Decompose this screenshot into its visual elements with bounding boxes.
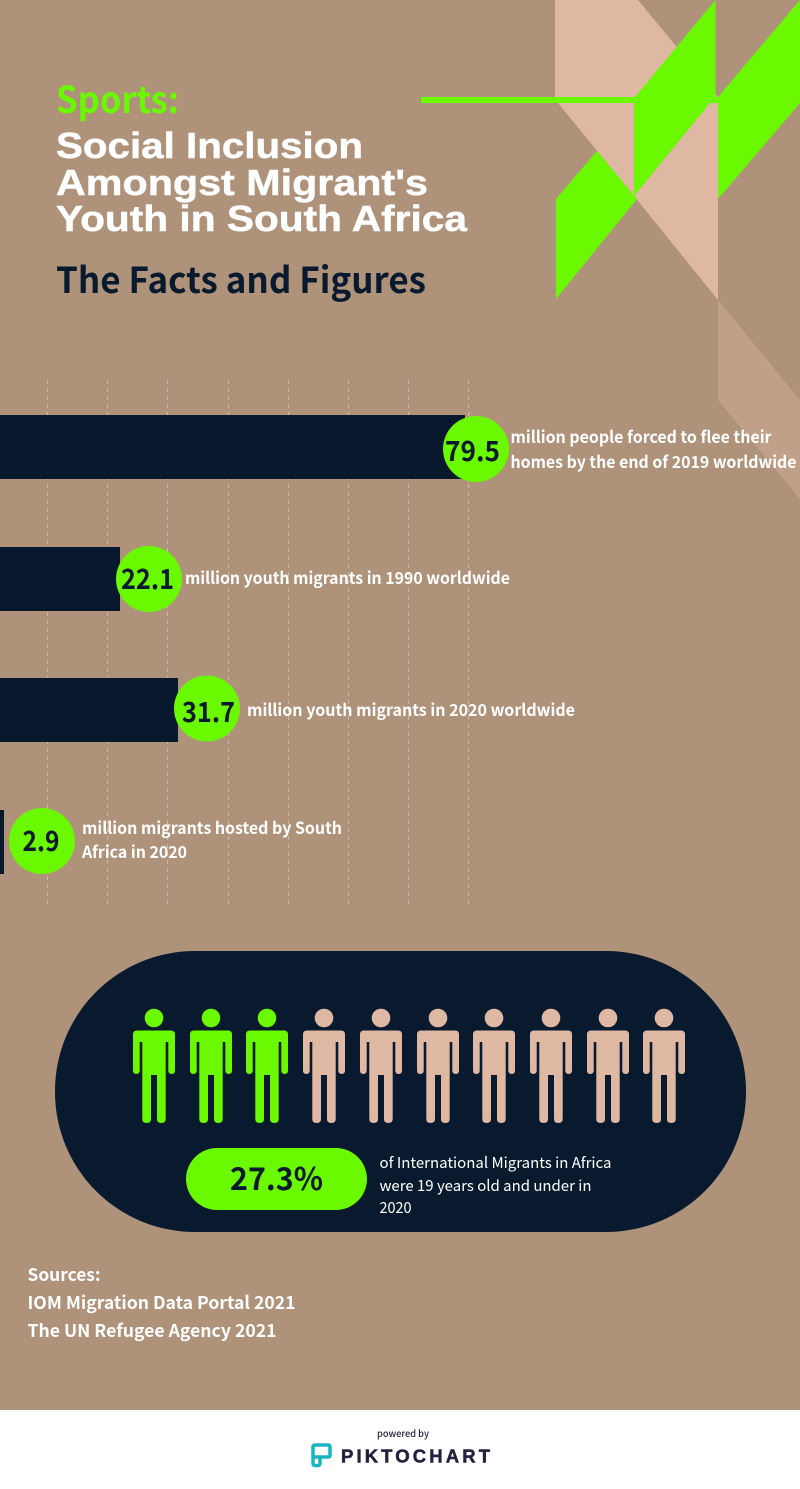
icon: Piktochart logo (313, 1445, 330, 1466)
stat description: were 19 years old and under in (380, 1175, 592, 1196)
bar: 31.7 million youth migrants 2020: 31.7 (182, 691, 235, 731)
bar: 22.1 million youth migrants 1990 (0, 546, 510, 612)
stat description: 2020 (380, 1197, 412, 1218)
title: main heading: Social Inclusion (56, 125, 363, 166)
stat description (380, 1152, 612, 1218)
sources: IOM Migration Data Portal 2021 (28, 1289, 296, 1315)
bar: 79.5 million forced to flee: 79.5 (445, 430, 500, 470)
footer: powered by Piktochart (0, 1410, 800, 1489)
bar: 79.5 million forced to flee (0, 415, 796, 482)
bar: 2.9 million migrants hosted by South Africa: Africa in 2020 (81, 839, 187, 863)
title: main heading (56, 125, 468, 239)
subtitle: facts and figures: The Facts and Figures (56, 252, 426, 304)
panel: youth share of migrants (55, 951, 746, 1232)
sources: The UN Refugee Agency 2021 (28, 1317, 276, 1343)
bar: 2.9 million migrants hosted by South Africa: 2.9 (22, 820, 60, 860)
stat description: of International Migrants in Africa (380, 1152, 612, 1173)
bar: 79.5 million forced to flee: homes by the end of 2019 worldwide (510, 449, 796, 473)
title: main heading: Youth in South Africa (56, 198, 468, 239)
title: main heading: Amongst Migrant's (56, 162, 428, 203)
bar: 2.9 million migrants hosted by South Africa: million migrants hosted by South (82, 815, 342, 839)
sources (28, 1261, 296, 1343)
bar: 31.7 million youth migrants 2020: million youth migrants in 2020 worldwide (247, 697, 575, 721)
footer: powered by Piktochart: powered by (377, 1426, 430, 1440)
stat pill: 27.3%: 27.3% (230, 1154, 323, 1199)
footer: powered by Piktochart: PIKTOCHART (341, 1446, 491, 1466)
bar: 22.1 million youth migrants 1990: 22.1 (121, 558, 174, 598)
bar: 2.9 million migrants hosted by South Africa (0, 808, 342, 874)
bar: 31.7 million youth migrants 2020 (0, 676, 575, 742)
title: Sports: Sports: (56, 70, 179, 124)
bar: 79.5 million forced to flee: million people forced to flee their (510, 424, 772, 448)
stat pill: 27.3% (186, 1148, 367, 1210)
bar: 22.1 million youth migrants 1990: million youth migrants in 1990 worldwide (185, 565, 510, 589)
pictogram: 3 of 10 people highlighted (133, 1009, 685, 1123)
sources: Sources: (28, 1261, 100, 1287)
decorative geometric shapes (421, 0, 800, 499)
chart gridlines (48, 380, 468, 905)
